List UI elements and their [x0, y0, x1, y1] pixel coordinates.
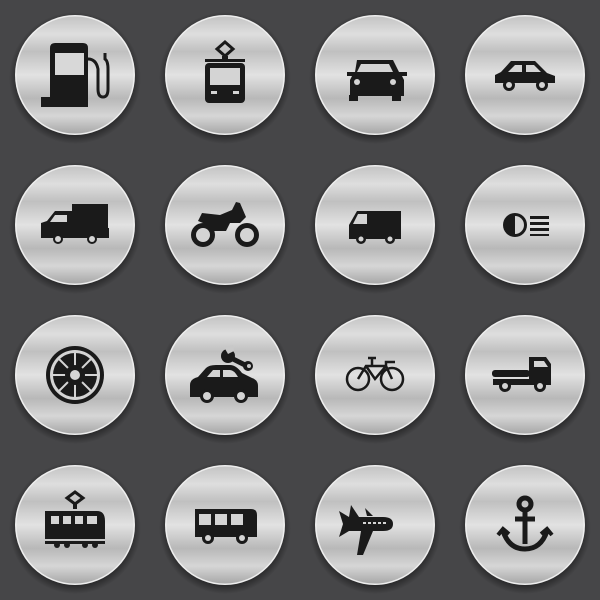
- icon: headlight: [503, 213, 549, 237]
- icon: van: [349, 211, 401, 244]
- icon: tram side: [45, 492, 105, 548]
- icon: motorcycle: [191, 202, 259, 247]
- icon: airplane: [339, 505, 393, 555]
- icon: anchor: [498, 498, 552, 549]
- icon: box truck: [41, 204, 109, 244]
- icon: bus: [195, 509, 257, 544]
- icon: car front: [347, 60, 407, 101]
- icon: gas pump: [41, 43, 108, 107]
- icon: tow truck: [492, 357, 551, 392]
- icon: hatchback car: [495, 61, 555, 91]
- icon: bicycle: [347, 358, 403, 390]
- icon: tram front: [205, 42, 245, 103]
- icon: car repair: [190, 345, 258, 403]
- icon: wheel: [46, 346, 104, 404]
